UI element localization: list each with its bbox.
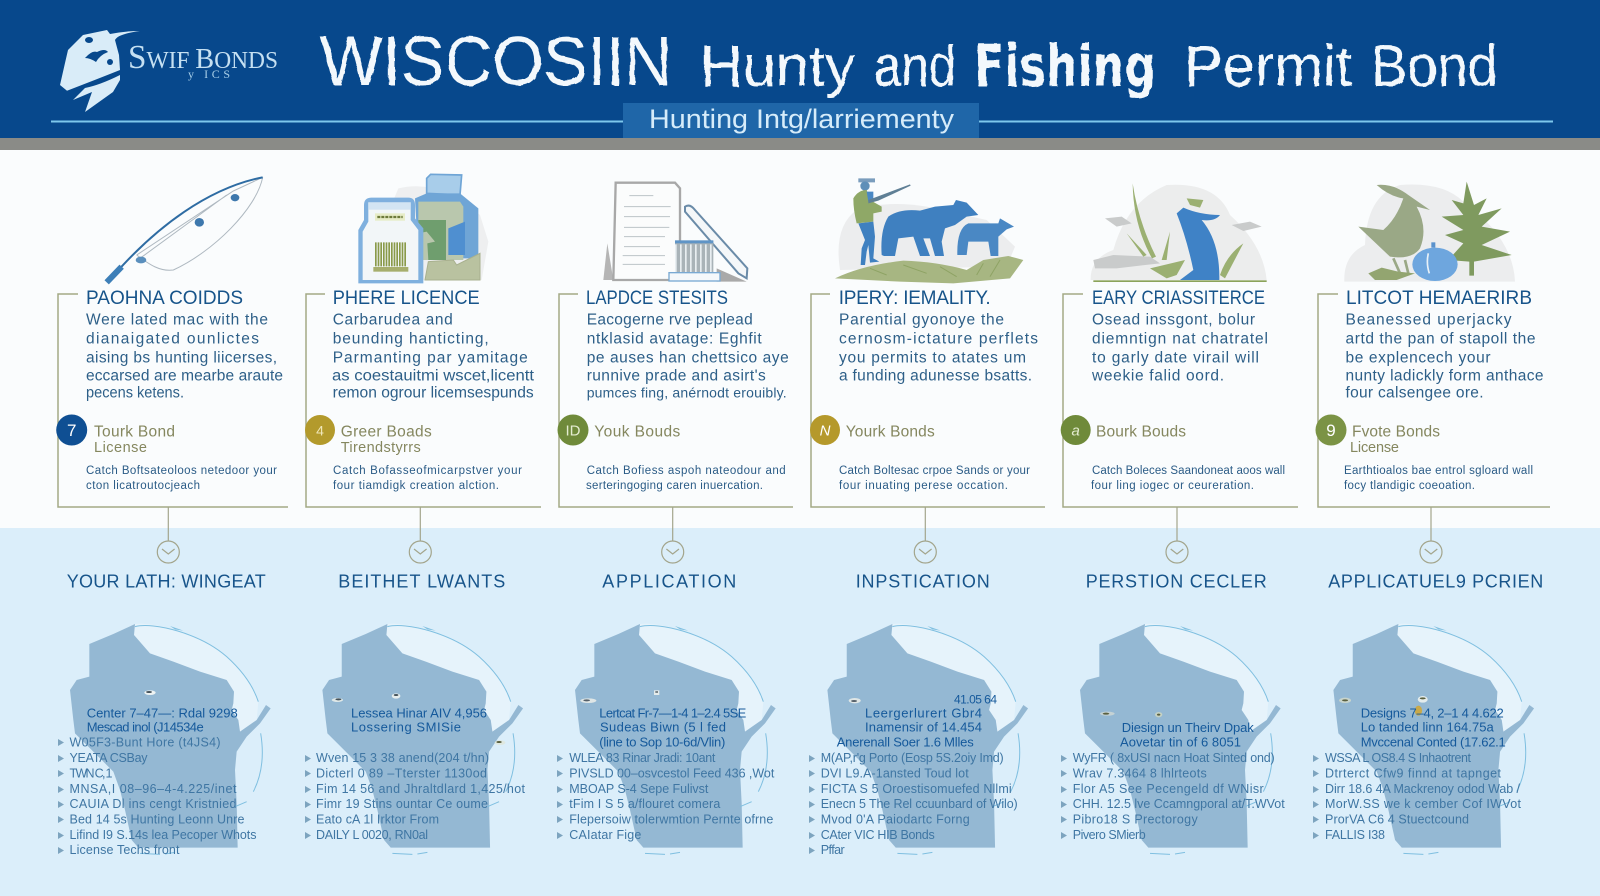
section heading: PERSTION CECLER xyxy=(1086,572,1267,592)
bullet list: DVI L9.A-1ansted Toud lot xyxy=(821,766,969,780)
map callout text: (line to Sop 10-6d/Vlin) xyxy=(599,735,725,750)
badge label xyxy=(1350,424,1440,456)
map callout text xyxy=(1361,705,1506,750)
small note: serteringoging caren inuercation. xyxy=(586,480,763,492)
bullet list xyxy=(557,751,775,842)
panel body text: dianaigated ounlictes xyxy=(86,331,259,348)
badge label xyxy=(94,424,175,456)
badge label xyxy=(341,424,432,456)
subtitle ribbon: Hunting Intg/larriementy xyxy=(649,104,955,134)
bullet list: Bed 14 5s Hunting Leonn Unre xyxy=(70,812,245,826)
panel body text: be explencech your xyxy=(1346,349,1490,366)
small note xyxy=(86,465,277,492)
bullet list xyxy=(1061,751,1285,842)
panel body text: beunding hanticting, xyxy=(333,331,489,348)
panel: Litcot Hemaerirb xyxy=(1316,182,1550,507)
number badge: a xyxy=(1072,422,1080,440)
section heading: INPSTICATION xyxy=(856,572,990,592)
bullet list: Enecn 5 The Rel ccuunbard of Wilo) xyxy=(821,797,1018,811)
panel frame xyxy=(811,294,1045,507)
connector arrow xyxy=(914,507,936,563)
map callout text: Diesign un Theirv Dpak xyxy=(1122,720,1254,735)
panel body text xyxy=(587,311,789,401)
panel body text: diemntign nat chatratel xyxy=(1092,331,1268,348)
icon: Swift Bonds fish logo xyxy=(60,30,140,112)
icon: bottles and bag xyxy=(358,174,488,283)
panel body text: pecens ketens. xyxy=(86,385,184,402)
panel body text: a funding adunesse bsatts. xyxy=(839,368,1032,385)
small note xyxy=(1091,465,1285,492)
panel heading: IPERY: IEMALITY. xyxy=(839,288,991,309)
panel body text: Parmanting par yamitage xyxy=(333,349,528,366)
map callout text: Sudeas Biwn (5 l fed xyxy=(600,720,726,735)
panel body text: Parential gyonoye the xyxy=(839,311,1004,328)
connector arrow xyxy=(409,507,431,563)
logo wordmark: SWIF BONDS xyxy=(128,39,278,76)
small note xyxy=(586,465,786,492)
panel body text: as coestauitmi wscet,licentt xyxy=(332,368,535,385)
panel heading: LITCOT HEMAERIRB xyxy=(1346,288,1532,309)
title: Permit xyxy=(1184,34,1352,99)
panel body text: cernosm-ictature perflets xyxy=(839,331,1038,348)
bullet list: MBOAP S-4 Sepe Fulivst xyxy=(569,782,709,796)
bullet list: Pibro18 S Prectorogy xyxy=(1073,812,1198,826)
bullet list: tFim I S 5 a/flouret comera xyxy=(569,797,720,811)
bullet list xyxy=(305,751,526,842)
panel body text: aising bs hunting liicerses, xyxy=(86,349,277,366)
map callout text: Anerenall Soer 1.6 Mlles xyxy=(837,735,974,750)
badge label: License xyxy=(94,440,147,456)
panel body text: runnive prade and asirt's xyxy=(587,368,766,385)
icon: fishing rod xyxy=(107,177,263,282)
panel body text: weekie falid oord. xyxy=(1091,368,1224,385)
bullet list: W05F3-Bunt Hore (t4JS4) xyxy=(70,736,220,750)
panel body text: pumces fing, anérnodt erouibly. xyxy=(587,385,787,401)
bullet list: License Techs front xyxy=(70,843,180,857)
panel body text xyxy=(332,311,535,402)
map callout text: Mescad inol (J14534e xyxy=(87,720,204,735)
icon: bird, tree and pumpkin xyxy=(1344,182,1515,282)
small note: Catch Bofiess aspoh nateodour and xyxy=(587,465,786,477)
map callout text: Lossering SMISie xyxy=(351,720,461,735)
section: Application xyxy=(557,507,776,854)
map callout text xyxy=(599,705,747,750)
map callout text: Lertcat Fr-7—1-4 1–2.4 5SE xyxy=(599,705,747,720)
number badge: 4 xyxy=(316,422,324,438)
panel body text xyxy=(1346,311,1544,402)
map: Wisconsin xyxy=(827,624,1028,854)
number badge xyxy=(1061,415,1091,445)
map callout text: Inamensir of 14.454 xyxy=(865,720,982,735)
badge label: Tourk Bond xyxy=(94,424,175,441)
bullet list: Dirr 18.6 4A Mackrenoy odod Wab / xyxy=(1325,782,1521,796)
number badge: N xyxy=(820,422,831,440)
map callout text: Leergerlurert Gbr4 xyxy=(865,705,982,720)
section: Your Lath Wingeat xyxy=(58,507,271,857)
panel body text xyxy=(1091,311,1268,385)
small note xyxy=(839,465,1030,492)
panel: Paohna Coidds xyxy=(56,177,288,507)
section: Beithet Lwants xyxy=(305,507,526,854)
map: Wisconsin xyxy=(1333,624,1534,854)
bullet list: WLEA 83 Rinar Jradi: 10ant xyxy=(569,751,716,765)
small note: cton licatroutocjeach xyxy=(86,480,200,492)
bullet list: Dicterl 0 89 –Tterster 1130od xyxy=(316,766,487,780)
bullet list: Flepersoiw tolerwmtion Pernte ofrne xyxy=(569,812,773,826)
bullet list: ProrVA C6 4 Stuectcound xyxy=(1325,812,1469,826)
bullet list: Pivero SMierb xyxy=(1073,828,1146,842)
panel: Phere Licence xyxy=(305,174,541,507)
small note xyxy=(1344,465,1533,492)
map callout text xyxy=(1120,720,1254,750)
title xyxy=(320,22,1498,100)
small note xyxy=(333,465,522,492)
icon: document and pen xyxy=(603,183,747,282)
bullet list: CAUIA Dl ins cengt Kristnied xyxy=(70,797,237,811)
bullet list: Mvod 0'A Paiodartc Forng xyxy=(821,812,970,826)
panel body text: Beanessed uperjacky xyxy=(1346,311,1512,328)
map callout text: Lessea Hinar AIV 4,956 xyxy=(351,705,487,720)
panel heading: PHERE LICENCE xyxy=(333,288,480,309)
panel frame xyxy=(1318,294,1550,507)
panel: Eary Criassiterce xyxy=(1061,183,1298,507)
bullet list: FALLIS I38 xyxy=(1325,828,1385,842)
panel body text: pe auses han chettsico aye xyxy=(587,349,789,366)
connector arrow xyxy=(662,507,684,563)
bullet list xyxy=(58,736,256,857)
map: Wisconsin xyxy=(322,624,523,854)
small note: Catch Bofasseofmicarpstver your xyxy=(333,465,522,477)
map callout text: Mvccenal Conted (17.62.1 xyxy=(1361,735,1506,750)
panel body text: Were lated mac with the xyxy=(86,311,268,328)
bullet list: CAter VIC HIB Bonds xyxy=(821,828,935,842)
bullet list: WSSA L OS8.4 S Inhaotrent xyxy=(1325,751,1472,765)
bullet list: Dtrterct Cfw9 finnd at tapnget xyxy=(1325,766,1502,780)
panel body text xyxy=(86,311,283,402)
bullet list: WyFR ( 8xUSI nacn Hoat Sinted ond) xyxy=(1073,751,1275,765)
map callout text: Designs 7–4, 2–1 4 4.622 xyxy=(1361,705,1504,720)
panel body text: you permits to atates um xyxy=(839,349,1026,366)
icon: wetland scene xyxy=(1091,183,1267,282)
number badge xyxy=(558,414,588,446)
map callout text: Aovetar tin of 6 8051 xyxy=(1120,735,1241,750)
map: Wisconsin xyxy=(1080,624,1281,854)
map marker value: 41.05 64 xyxy=(954,692,997,706)
panel: Lapdce Stesits xyxy=(558,183,793,507)
bullet list: MorW.SS we k cember Cof IWVot xyxy=(1325,797,1522,811)
title: and xyxy=(874,34,956,99)
title: Bond xyxy=(1371,34,1498,99)
section heading: BEITHET LWANTS xyxy=(338,572,505,592)
panel heading: LAPDCE STESITS xyxy=(586,288,728,309)
bullet list: Wrav 7.3464 8 lhlrteots xyxy=(1073,766,1207,780)
map: Wisconsin xyxy=(575,624,776,854)
map callout text xyxy=(837,705,982,750)
small note: Catch Boftsateoloos netedoor your xyxy=(86,465,277,477)
section heading: APPLICATUEL9 PCRIEN xyxy=(1328,572,1543,592)
map callout text: Lo tanded linn 164.75a xyxy=(1361,720,1494,735)
subtitle ribbon xyxy=(623,103,979,138)
number badge: 7 xyxy=(67,421,76,440)
badge label: Fvote Bonds xyxy=(1352,424,1440,441)
panel body text: remon ogrour licemsespunds xyxy=(333,385,534,402)
panel frame xyxy=(58,294,288,507)
title: Fishing xyxy=(974,32,1156,100)
panel frame xyxy=(306,294,541,507)
bullet list: Wven 15 3 38 anend(204 t/hn) xyxy=(316,751,489,765)
number badge xyxy=(56,414,87,446)
bullet list: TWN C, 1 xyxy=(70,766,113,780)
panel body text: four calsengee ore. xyxy=(1346,385,1484,402)
bullet list: CAIatar Fige xyxy=(569,828,641,842)
section heading: APPLICATION xyxy=(602,572,736,592)
bullet list: Fim 14 56 and Jhraltdlard 1,425/hot xyxy=(316,782,526,796)
number badge: 9 xyxy=(1326,421,1336,440)
bullet list: Flor A5 See Pecengeld df WNisr xyxy=(1073,782,1264,796)
panel body text: Carbarudea and xyxy=(333,311,453,328)
bullet list: PIVSLD 00–osvcestol Feed 436 ,Wot xyxy=(569,766,775,780)
bullet list: MNSA,I 08–96–4-4.225/inet xyxy=(70,782,237,796)
section: Inpstication xyxy=(809,507,1028,857)
bullet list: Fimr 19 Stins ountar Ce oume xyxy=(316,797,488,811)
panel body text: to garly date virail will xyxy=(1092,349,1259,366)
bullet list: YEATA CSBay xyxy=(70,751,148,765)
bullet list: Eato cA 1l Irktor From xyxy=(316,812,439,826)
bullet list xyxy=(809,751,1018,857)
bullet list: Lifind I9 S.14s lea Pecoper Whots xyxy=(70,828,256,842)
logo wordmark: y ICS xyxy=(188,67,230,81)
map: Wisconsin xyxy=(70,624,271,854)
panel body text: artd the pan of stapoll the xyxy=(1346,331,1536,348)
number badge xyxy=(1316,414,1346,446)
connector arrow xyxy=(157,507,179,563)
number badge: ID xyxy=(566,422,581,440)
panel frame xyxy=(559,294,793,507)
connector arrow xyxy=(1420,507,1442,563)
panel heading: EARY CRIASSITERCE xyxy=(1092,288,1265,309)
panel: Pery Iemality xyxy=(810,178,1045,507)
small note: four ling iogec or ceureration. xyxy=(1091,480,1254,492)
section: Perstion Cecler xyxy=(1061,507,1285,854)
small note: focy tlandigic coeoation. xyxy=(1344,480,1475,492)
badge label: Tirendstyrrs xyxy=(341,440,421,456)
bullet list: DAILY L 0020, RN0al xyxy=(316,828,428,842)
section heading: YOUR LATH: WINGEAT xyxy=(67,572,266,592)
panel body text: Eacogerne rve peplead xyxy=(587,311,753,328)
small note: Catch Boleces Saandoneat aoos wall xyxy=(1092,465,1285,477)
badge label: Greer Boads xyxy=(341,424,432,441)
badge label: Youk Bouds xyxy=(594,424,681,441)
panel body text xyxy=(839,311,1038,385)
number badge xyxy=(305,415,335,445)
map callout text xyxy=(351,705,487,735)
panel body text: ntklasid avatage: Eghfit xyxy=(587,331,762,348)
panel body text: Osead inssgont, bolur xyxy=(1092,311,1255,328)
section: Applicatuel9 Pcrien xyxy=(1313,507,1543,854)
badge label: Bourk Bouds xyxy=(1096,424,1186,441)
header banner xyxy=(0,0,1600,150)
bullet list: CHH. 12.5 lve Ccamngporal at/T.WVot xyxy=(1073,797,1285,811)
bullet list: Pffar xyxy=(821,843,845,857)
small note: four inuating perese occation. xyxy=(839,480,1008,492)
map callout text: Center 7–47—: Rdal 9298 xyxy=(87,705,238,720)
title: Hunty xyxy=(700,34,855,99)
title: WISCOSIIN xyxy=(320,22,672,100)
number badge xyxy=(810,415,840,445)
connector arrow xyxy=(1166,507,1188,563)
badge label: License xyxy=(1350,440,1399,456)
small note: Earthtioalos bae entrol sgloard wall xyxy=(1344,465,1533,477)
panel frame xyxy=(1063,294,1298,507)
panel body text: eccarsed are mearbe araute xyxy=(86,368,283,385)
panel heading: PAOHNA COIDDS xyxy=(86,288,243,309)
badge label: Yourk Bonds xyxy=(846,424,935,441)
bullet list xyxy=(1313,751,1522,842)
panel body text: nunty ladickly form anthace xyxy=(1346,368,1544,385)
small note: Catch Boltesac crpoe Sands or your xyxy=(839,465,1030,477)
icon: hunter and bears xyxy=(835,178,1023,283)
map callout text xyxy=(87,705,238,735)
bullet list: M(AP,r'g Porto (Eosp 5S.2oiy Imd) xyxy=(821,751,1004,765)
bullet list: FICTA S 5 Oroestisomuefed Nllmi xyxy=(821,782,1012,796)
small note: four tiamdigk creation alction. xyxy=(333,480,499,492)
